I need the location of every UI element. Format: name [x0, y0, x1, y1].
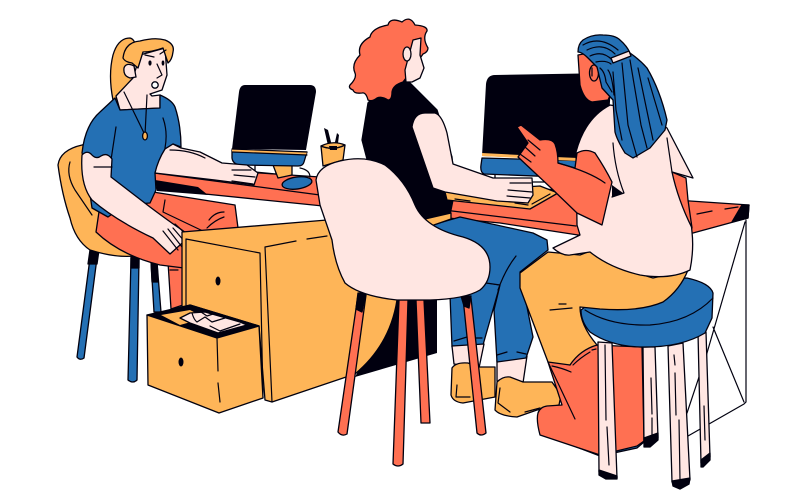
hair	[349, 19, 428, 101]
face details	[145, 50, 166, 88]
seat shell	[316, 159, 490, 300]
neck and face	[116, 48, 167, 110]
ponytail	[110, 38, 136, 100]
calf	[168, 258, 184, 309]
blue top	[82, 95, 181, 217]
right arm	[155, 144, 258, 185]
hair	[578, 35, 667, 158]
left chair	[58, 140, 161, 382]
cabinet shadow	[355, 300, 437, 377]
left monitor	[232, 85, 316, 191]
arm	[412, 113, 533, 203]
seat	[581, 278, 713, 347]
face	[405, 38, 424, 82]
ear	[124, 64, 136, 78]
person center	[349, 19, 561, 417]
back shoe	[451, 363, 495, 403]
shirt	[553, 105, 693, 277]
necklace	[124, 92, 147, 135]
right arm	[672, 172, 692, 228]
torso	[362, 78, 455, 220]
left arm and hand	[517, 125, 612, 225]
filing cabinet	[147, 220, 397, 413]
chair legs	[338, 295, 366, 435]
left arm	[82, 152, 190, 254]
belt	[425, 213, 451, 226]
trousers	[520, 250, 688, 365]
stool	[581, 278, 713, 489]
mouse	[281, 175, 313, 191]
hair clip	[611, 51, 631, 63]
hair	[123, 39, 173, 68]
front shoe	[495, 377, 561, 417]
person right	[517, 35, 713, 489]
open drawer	[147, 305, 263, 413]
boot	[540, 428, 644, 456]
desk frame legs	[687, 220, 746, 436]
right monitor	[481, 73, 612, 182]
desk top	[154, 170, 749, 235]
paper	[445, 186, 558, 209]
pen cup	[321, 128, 345, 166]
head	[578, 50, 615, 102]
pants	[96, 192, 238, 268]
person left	[82, 38, 258, 309]
center chair	[316, 159, 490, 466]
sleeve shadow	[612, 185, 623, 197]
trouser legs	[450, 280, 500, 347]
front trouser leg	[432, 217, 548, 362]
